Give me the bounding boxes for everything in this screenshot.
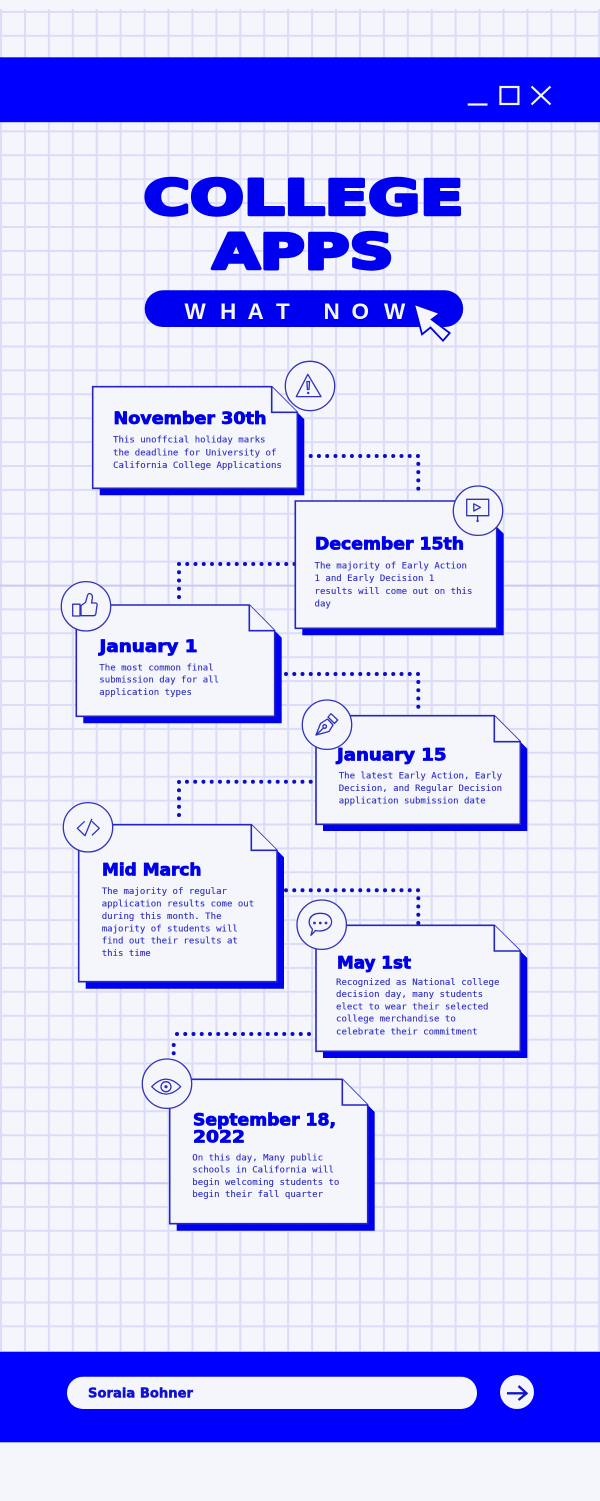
name pill: Soraia Bohner — [88, 1386, 193, 1402]
body text: find out their results at — [102, 937, 238, 947]
card: November 30th — [93, 387, 304, 495]
top window bar — [0, 57, 600, 122]
body text: results will come out on this — [314, 587, 472, 597]
icon: presentation — [453, 486, 503, 535]
card: May 1st — [316, 925, 527, 1058]
body text: this time — [102, 949, 151, 959]
body text: California College Applications — [113, 461, 282, 471]
connector 6 drop — [172, 1045, 176, 1054]
body text: majority of students will — [102, 924, 238, 934]
bottom bar — [0, 1352, 600, 1442]
body text: day — [314, 600, 331, 610]
connector 1 — [311, 456, 418, 491]
connector 5 — [286, 890, 418, 925]
heading: November 30th — [114, 409, 266, 428]
icon: minimize — [468, 103, 488, 106]
connector 2 — [179, 564, 294, 598]
body text: application results come out — [102, 900, 254, 910]
card: January 1 — [76, 605, 282, 723]
icon: cursor — [414, 304, 450, 341]
icon: close — [532, 86, 550, 104]
body text: during this month. The — [102, 912, 222, 922]
body text: elect to wear their selected — [336, 1003, 489, 1013]
card: December 15th — [295, 501, 504, 635]
body text: 1 and Early Decision 1 — [314, 574, 434, 584]
icon: thumbs up — [61, 582, 111, 631]
heading: December 15th — [315, 534, 464, 553]
subtitle pill: WHATNOW — [184, 299, 406, 324]
icon: speech bubble — [297, 900, 346, 949]
heading: May 1st — [337, 953, 411, 972]
body text: schools in California will — [192, 1165, 334, 1175]
heading: January 1 — [98, 637, 198, 656]
body text: college merchandise to — [336, 1015, 456, 1025]
subtitle pill — [145, 290, 463, 327]
body text: The majority of Early Action — [314, 561, 467, 571]
card: January 15 — [316, 716, 527, 831]
body text: application types — [99, 688, 192, 698]
body text: Recognized as National college — [336, 978, 499, 988]
title — [144, 170, 464, 280]
icon: eye — [142, 1059, 192, 1108]
card: Mid March — [79, 825, 284, 989]
body text: the deadline for University of — [113, 448, 276, 458]
connector 4 — [179, 782, 311, 816]
body text: The most common final — [99, 663, 214, 673]
body text: submission day for all — [99, 675, 219, 685]
body text: decision day, many students — [336, 990, 483, 1000]
body text: begin their fall quarter — [192, 1190, 324, 1200]
title: COLLEGE — [144, 170, 464, 226]
body text: Decision, and Regular Decision — [339, 784, 502, 794]
body text: application submission date — [339, 796, 486, 806]
name pill — [67, 1377, 477, 1409]
icon: maximize — [500, 87, 518, 104]
body text: celebrate their commitment — [336, 1027, 478, 1037]
icon: arrow button — [500, 1375, 534, 1409]
icon: fountain pen — [302, 700, 352, 749]
heading: September 18, — [193, 1111, 336, 1130]
heading: 2022 — [193, 1128, 245, 1147]
title: APPS — [212, 224, 394, 280]
heading: January 15 — [336, 746, 446, 765]
icon: code — [63, 803, 113, 852]
card: September 18, 2022 — [170, 1079, 375, 1231]
body text: begin welcoming students to — [192, 1178, 339, 1188]
body text: On this day, Many public — [192, 1153, 323, 1163]
body text: The latest Early Action, Early — [339, 771, 503, 781]
connector 6 — [177, 1032, 309, 1036]
body text: This unoffcial holiday marks — [113, 436, 266, 446]
body text: The majority of regular — [102, 887, 228, 897]
connector 3 — [286, 674, 418, 708]
icon: warning — [285, 361, 335, 411]
heading: Mid March — [102, 861, 202, 880]
